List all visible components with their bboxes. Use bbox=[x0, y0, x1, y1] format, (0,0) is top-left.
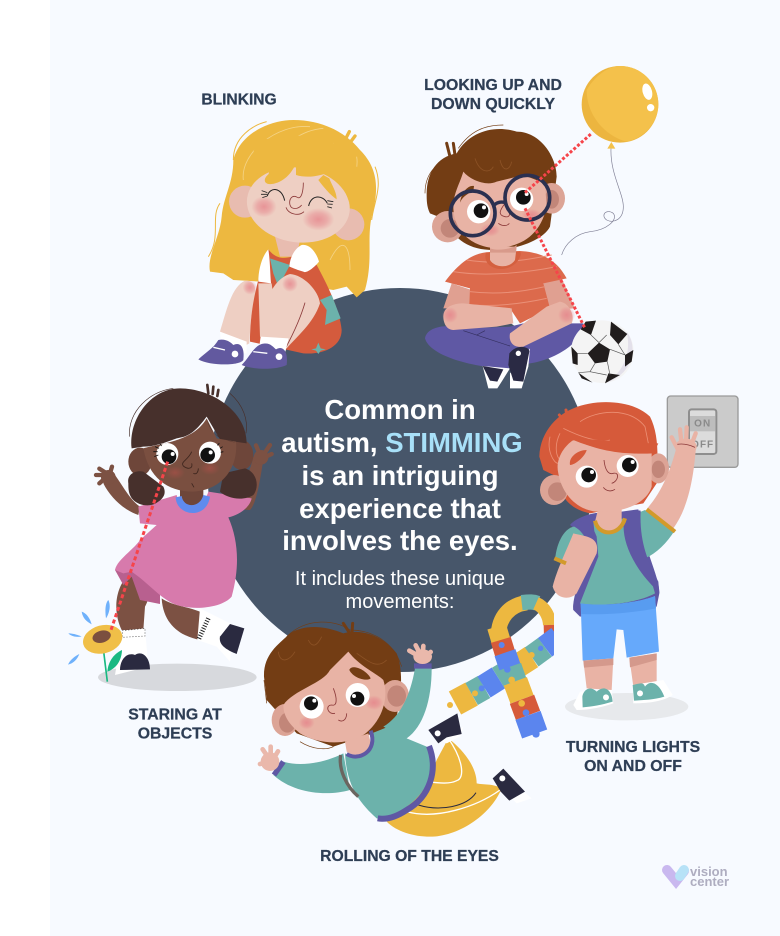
flower bbox=[103, 643, 107, 682]
eyes bbox=[267, 189, 327, 206]
left leg bbox=[220, 281, 255, 348]
neck bbox=[595, 508, 622, 531]
hair bbox=[131, 388, 247, 448]
eyes bbox=[467, 200, 490, 223]
dotted gaze lines bbox=[525, 133, 592, 328]
central subtitle: It includes these unique bbox=[295, 568, 505, 590]
upper arms bbox=[443, 278, 575, 310]
child: staring at objects bbox=[68, 385, 272, 691]
ribbon: puzzle awareness ribbon bbox=[447, 602, 558, 738]
soccer ball bbox=[571, 320, 634, 383]
central title: autism, STIMMING bbox=[281, 427, 523, 458]
heading: staring at objects: STARING AT bbox=[128, 706, 222, 724]
dotted gaze line bbox=[111, 462, 168, 630]
hair bbox=[264, 627, 401, 747]
child: rolling of the eyes bbox=[260, 622, 532, 837]
logo: vision center bbox=[667, 864, 729, 889]
face bbox=[143, 418, 236, 492]
shorts bbox=[581, 596, 659, 661]
child: looking up and down with glasses bbox=[425, 66, 658, 388]
arm right and hand bbox=[647, 447, 696, 528]
face bbox=[283, 652, 385, 742]
shirt bbox=[445, 251, 567, 323]
ground shadow bbox=[98, 664, 257, 691]
light switch bbox=[667, 396, 738, 467]
straps bbox=[624, 510, 659, 593]
face bbox=[453, 172, 547, 248]
heading: looking up and down quickly: DOWN QUICKLY bbox=[431, 96, 555, 113]
eyes bbox=[300, 695, 324, 719]
hair bbox=[539, 402, 658, 513]
backpack bbox=[570, 509, 659, 617]
shoes bbox=[440, 727, 532, 803]
socks and shoes bbox=[115, 628, 148, 675]
shirt bbox=[579, 510, 675, 605]
logo mark bbox=[667, 870, 684, 881]
hair curls bbox=[128, 471, 165, 505]
right leg bbox=[260, 274, 320, 348]
infographic canvas bbox=[68, 66, 739, 889]
central dark circle bbox=[208, 288, 592, 672]
legs bbox=[116, 572, 149, 630]
neck bbox=[275, 237, 300, 257]
hair bbox=[209, 120, 376, 297]
face bbox=[242, 161, 355, 249]
shoes bbox=[220, 332, 247, 353]
ears bbox=[272, 704, 298, 736]
child: blinking girl bbox=[198, 120, 378, 369]
ears bbox=[128, 448, 152, 476]
legs bbox=[583, 653, 657, 690]
neck and collar bbox=[345, 733, 372, 755]
right arm bbox=[383, 668, 432, 738]
neck bbox=[180, 487, 203, 507]
eyes bbox=[156, 443, 178, 465]
arm left and hand bbox=[103, 475, 140, 515]
arm left bbox=[553, 533, 597, 598]
dress bbox=[250, 249, 342, 354]
face bbox=[558, 440, 652, 512]
glasses bbox=[450, 191, 495, 236]
bangs bbox=[245, 133, 360, 207]
logo wordmark: center bbox=[690, 874, 729, 889]
central title: involves the eyes. bbox=[282, 525, 518, 556]
heading: turning lights on and off: TURNING LIGHTS bbox=[566, 739, 700, 756]
shoes bbox=[483, 366, 510, 388]
ears bbox=[540, 475, 568, 505]
torso bbox=[345, 723, 431, 819]
ears bbox=[229, 186, 261, 218]
shoes bbox=[573, 690, 613, 710]
heading: blinking: BLINKING bbox=[201, 92, 277, 108]
hair bbox=[427, 129, 557, 250]
central subtitle: movements: bbox=[346, 591, 454, 613]
sleeves bbox=[258, 249, 271, 283]
heading: staring at objects: OBJECTS bbox=[138, 726, 212, 742]
ground shadow bbox=[565, 693, 688, 720]
balloon bbox=[582, 66, 658, 143]
forearms bbox=[443, 303, 513, 330]
child: turning lights on and off: ON bbox=[694, 419, 711, 430]
arm right and hand bbox=[227, 457, 263, 510]
central title: is an intriguing bbox=[301, 460, 499, 491]
ears bbox=[432, 211, 463, 242]
child: turning lights on and off: OFF bbox=[691, 439, 714, 450]
heading: turning lights on and off: ON AND OFF bbox=[584, 758, 682, 775]
central title: experience that bbox=[299, 493, 501, 524]
dress bbox=[115, 553, 160, 604]
logo wordmark: vision bbox=[690, 864, 728, 879]
pants bbox=[387, 738, 502, 837]
legs bbox=[425, 323, 583, 368]
child: turning lights on and off bbox=[539, 396, 738, 720]
heading: looking up and down quickly: LOOKING UP AND bbox=[424, 77, 562, 94]
heading: rolling of the eyes: ROLLING OF THE EYES bbox=[320, 848, 499, 865]
central title: Common in bbox=[324, 394, 476, 425]
left arm bbox=[273, 753, 350, 793]
